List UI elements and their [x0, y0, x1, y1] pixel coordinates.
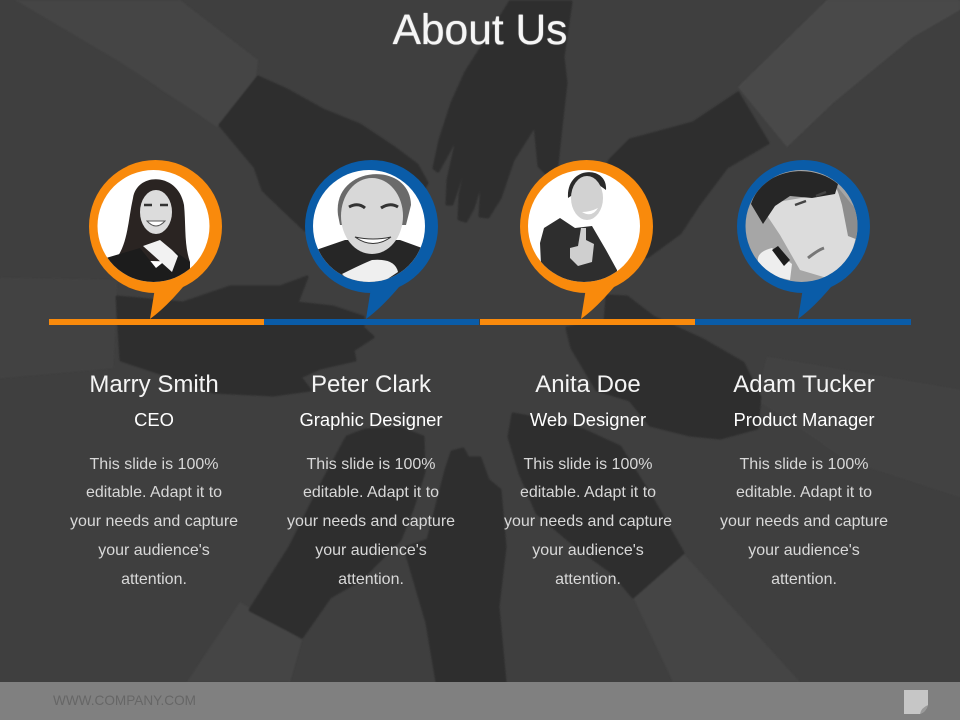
- column: Anita Doe: editable. Adapt it to: [520, 484, 656, 501]
- column: Peter Clark: This slide is 100%: [307, 456, 435, 472]
- column: Peter Clark: your needs and capture: [287, 513, 455, 530]
- column: Adam Tucker: Adam Tucker: [733, 371, 875, 398]
- pin 2: Peter Clark: [305, 160, 438, 319]
- timeline with portrait pins: [49, 160, 911, 325]
- column: Adam Tucker: [720, 371, 888, 588]
- top-left hand: [220, 77, 427, 230]
- column: Peter Clark: Graphic Designer: [299, 409, 443, 430]
- timeline segment 3: [480, 319, 695, 325]
- column: Marry Smith: CEO: [134, 409, 174, 430]
- footer website text: WWW.COMPANY.COM: [53, 693, 196, 708]
- footer bar: [0, 682, 960, 720]
- column: Marry Smith: This slide is 100%: [90, 456, 218, 472]
- bottom-left hand: [250, 428, 424, 637]
- column: Anita Doe: [504, 371, 672, 588]
- column: Adam Tucker: Product Manager: [733, 409, 875, 430]
- column: Anita Doe: attention.: [555, 571, 621, 588]
- timeline segment 2: [264, 319, 479, 325]
- pin 1: Marry Smith: [89, 160, 222, 319]
- column: Marry Smith: attention.: [121, 571, 187, 588]
- pin 3: Anita Doe: [520, 160, 653, 319]
- column: Marry Smith: Marry Smith: [89, 371, 219, 398]
- column: Peter Clark: your audience's: [315, 542, 427, 559]
- top-center hand: [434, 2, 571, 221]
- column: Adam Tucker: your audience's: [748, 542, 860, 559]
- bottom-right hand: [509, 414, 683, 597]
- column: Anita Doe: This slide is 100%: [524, 456, 652, 472]
- column: Peter Clark: Peter Clark: [311, 371, 431, 398]
- column: Anita Doe: your needs and capture: [504, 513, 672, 530]
- column: Adam Tucker: attention.: [771, 571, 837, 588]
- timeline segment 4: [695, 319, 911, 325]
- column: Marry Smith: your needs and capture: [70, 513, 238, 530]
- bottom-center hand: [405, 449, 505, 682]
- left hand: [117, 277, 373, 395]
- column: Marry Smith: editable. Adapt it to: [86, 484, 222, 501]
- pin 4: Adam Tucker: [737, 160, 870, 319]
- column: Adam Tucker: your needs and capture: [720, 513, 888, 530]
- top-right hand: [590, 93, 768, 257]
- column: Marry Smith: [70, 371, 238, 588]
- column: Adam Tucker: This slide is 100%: [740, 456, 868, 472]
- column: Anita Doe: Anita Doe: [535, 371, 641, 398]
- title: About Us: [393, 7, 567, 54]
- right hand: [567, 296, 760, 438]
- column: Peter Clark: [287, 371, 455, 588]
- column: Anita Doe: your audience's: [532, 542, 644, 559]
- column: Anita Doe: Web Designer: [530, 409, 646, 430]
- column: Peter Clark: attention.: [338, 571, 404, 588]
- column: Peter Clark: editable. Adapt it to: [303, 484, 439, 501]
- timeline segment 1: [49, 319, 264, 325]
- icon: page note: [904, 690, 928, 714]
- column: Adam Tucker: editable. Adapt it to: [736, 484, 872, 501]
- column: Marry Smith: your audience's: [98, 542, 210, 559]
